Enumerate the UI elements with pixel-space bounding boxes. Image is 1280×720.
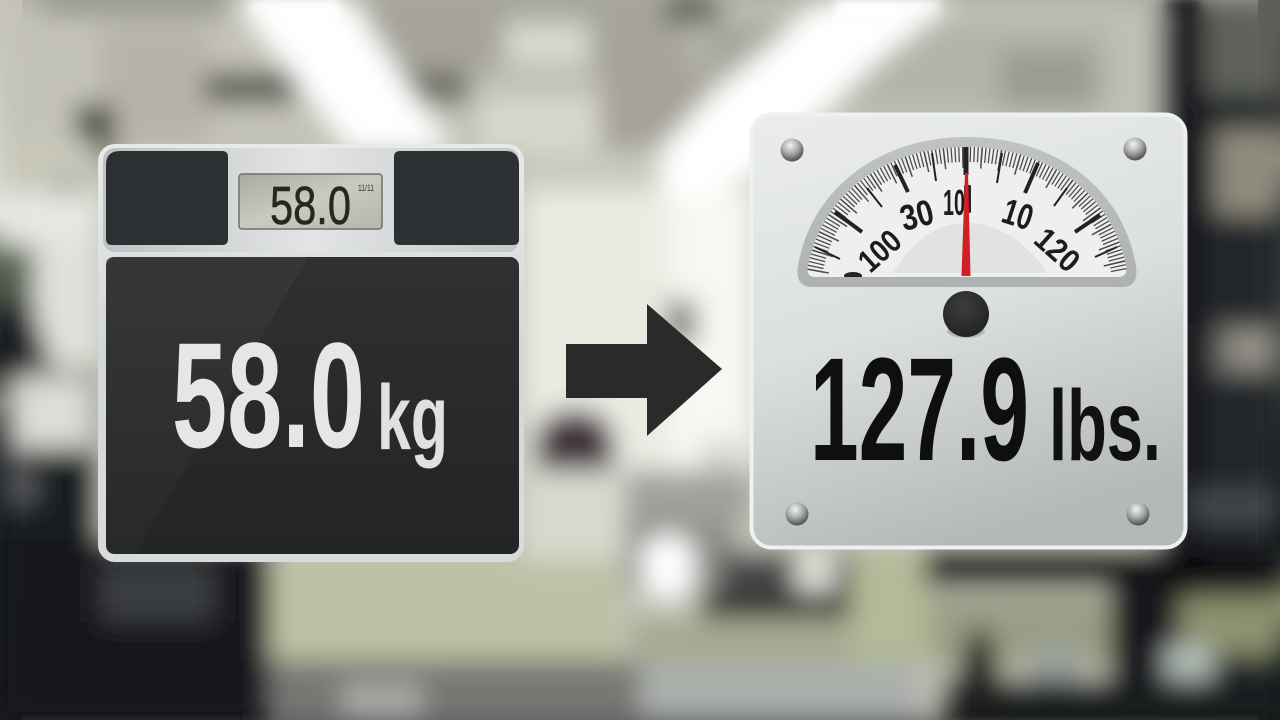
dial rim	[798, 137, 1136, 287]
dial tick marks	[808, 147, 1126, 280]
dial inner arc	[893, 223, 1047, 273]
kilogram unit: kg	[377, 367, 448, 469]
main dark panel	[106, 257, 519, 554]
metal plate	[752, 114, 1186, 548]
LCD unit mark: 11/11	[358, 183, 374, 193]
arrow	[566, 304, 722, 436]
panel sheen	[106, 257, 308, 554]
scale body	[98, 144, 524, 562]
red needle	[962, 173, 970, 276]
dial number 10 center: 10	[943, 182, 965, 223]
dial number 10 right: 10	[997, 190, 1038, 238]
left foot pad	[106, 151, 228, 245]
dial number 30: 30	[896, 191, 938, 239]
pound unit: lbs.	[1049, 370, 1161, 482]
dial number 100: 100	[851, 222, 908, 279]
kilogram value: 58.0	[172, 311, 365, 479]
screw bottom left	[786, 502, 808, 526]
dial gauge	[798, 137, 1136, 287]
knob	[943, 291, 989, 338]
center marker box	[964, 185, 971, 213]
dial face	[808, 147, 1126, 277]
LCD display	[239, 174, 382, 236]
screw top right	[1124, 138, 1146, 160]
right foot pad	[394, 151, 519, 245]
pound value: 127.9	[810, 328, 1029, 492]
screw bottom right	[1126, 502, 1150, 526]
panel: analog scale (pounds)	[752, 114, 1186, 548]
panel: digital scale (kilograms)	[98, 144, 524, 562]
screw top left	[780, 138, 804, 162]
top bar of scale	[103, 148, 519, 252]
dial number 120: 120	[1027, 220, 1087, 279]
LCD reading: 58.0	[270, 176, 351, 236]
